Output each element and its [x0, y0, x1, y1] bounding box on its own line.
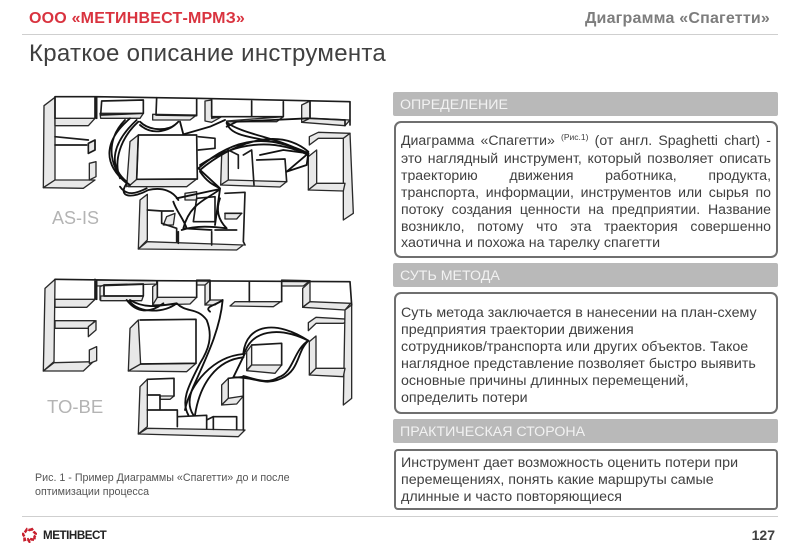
figure caption [35, 472, 290, 498]
page number: 127 [752, 527, 775, 543]
label: AS-IS: AS-IS [52, 208, 99, 228]
text: method essence: Суть метода заключается в нанесении на план-схему [401, 305, 757, 321]
header: definition [393, 92, 778, 116]
panel: definition [394, 121, 778, 258]
text: definition [401, 132, 771, 251]
header: definition: ОПРЕДЕЛЕНИЕ [400, 97, 508, 113]
diagram: AS-IS spaghetti plan [42, 96, 354, 251]
title: Краткое описание инструмента [29, 40, 386, 67]
icon: logo mark [22, 528, 37, 543]
logo: Metinvest [22, 528, 107, 543]
text: definition: Диаграмма «Спагетти» (Рис.1) (от англ. Spaghetti chart) - [401, 132, 771, 148]
figure caption: оптимизации процесса [35, 486, 149, 498]
text: method essence: определить потери [401, 390, 528, 406]
text: definition: транспорта, информации, инструментов или сырья по [401, 184, 771, 200]
text: method essence [401, 305, 757, 406]
slide topic: Диаграмма «Спагетти» [585, 10, 770, 27]
label: TO-BE: TO-BE [47, 396, 103, 417]
panel: method essence [394, 292, 778, 414]
text: practical side: длинные и часто повторяющиеся [401, 489, 622, 505]
text: definition: возникло, потому что эта траектория совершенно [401, 218, 771, 234]
text: method essence: сотрудников/транспорта или других объектов. Такое [401, 339, 748, 355]
building sides [43, 279, 352, 437]
header: practical side: ПРАКТИЧЕСКАЯ СТОРОНА [400, 424, 585, 440]
header: method essence: СУТЬ МЕТОДА [400, 268, 500, 284]
building sides [43, 97, 353, 250]
text: definition: это наглядный инструмент, который позволяет описать [401, 150, 771, 166]
text: practical side: Инструмент дает возможность оценить потери при [401, 455, 738, 471]
text: definition: траекторию движения работника, продукта, [401, 167, 771, 183]
figure caption: Рис. 1 - Пример Диаграммы «Спагетти» до и после [35, 472, 290, 484]
building outlines [55, 279, 352, 430]
text: practical side: перемещениях, понять какие маршруты самые [401, 472, 714, 488]
header: practical side [393, 419, 778, 443]
diagram: TO-BE optimised plan [42, 278, 352, 438]
company name: ООО «МЕТИНВЕСТ-МРМЗ» [29, 10, 245, 27]
text: definition: хаотична и похожа на тарелку спагетти [401, 235, 660, 251]
panel: practical side [394, 449, 778, 510]
optimised routes [127, 300, 308, 415]
text: method essence: основные причины длинных перемещений, [401, 373, 689, 389]
text: method essence: предприятия траектории движения [401, 322, 634, 338]
building outlines [55, 97, 350, 245]
logo wordmark: МЕТIНВЕСТ [43, 529, 106, 542]
text: method essence: наглядное представление позволяет быстро выявить [401, 356, 756, 372]
spaghetti routes [109, 118, 308, 230]
header: method essence [393, 263, 778, 287]
text: definition: потоку создания ценности на предприятии. Название [401, 201, 771, 217]
